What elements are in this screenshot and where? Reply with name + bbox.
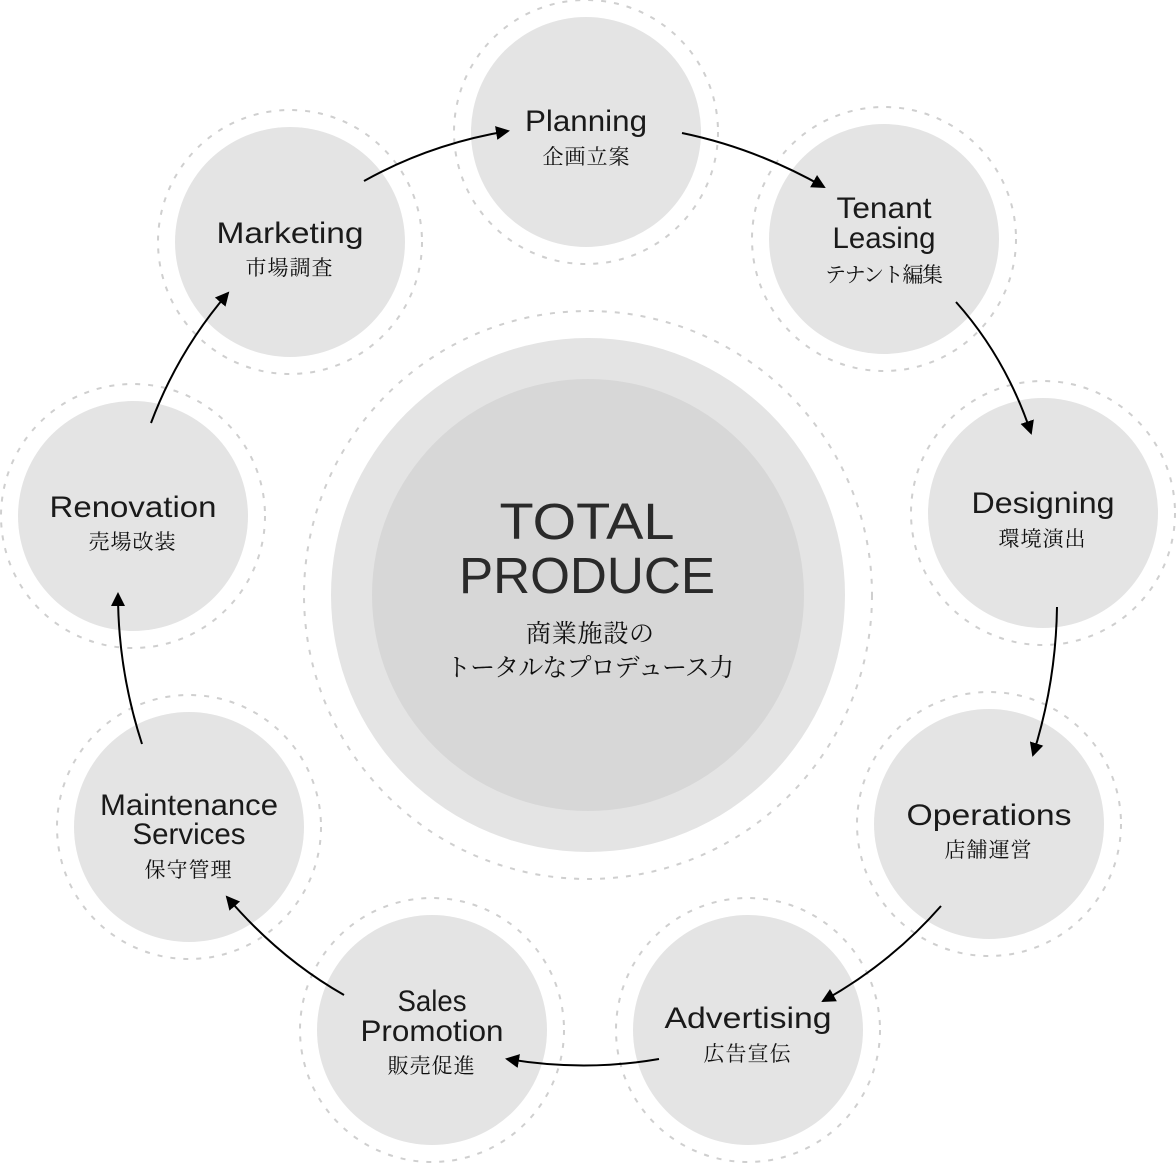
node: Tenant Leasing: Tenant <box>836 192 932 225</box>
node: Tenant Leasing <box>752 107 1016 371</box>
node: Maintenance Services <box>57 695 321 959</box>
arrow: Designing to Operations <box>1033 607 1057 755</box>
node: Designing <box>911 381 1175 645</box>
arrow: Marketing to Planning <box>364 131 508 181</box>
arrow: Sales Promotion to Maintenance <box>227 897 344 995</box>
arrow: Operations to Advertising <box>823 906 941 1001</box>
node: Advertising: Advertising <box>664 1002 832 1035</box>
node: Operations: Operations <box>906 799 1072 832</box>
node: Renovation: Renovation <box>50 491 216 524</box>
node: Tenant Leasing: Leasing <box>832 222 936 255</box>
node: Advertising <box>616 898 880 1162</box>
node: Maintenance Services: Maintenance <box>100 789 278 822</box>
center: total produce <box>304 311 872 879</box>
node: Planning: Planning <box>525 105 647 138</box>
node: Renovation: 売場改装 <box>88 530 176 554</box>
node: Tenant Leasing: テナント編集 <box>825 263 943 287</box>
arrow: Maintenance to Renovation <box>118 594 142 744</box>
node: Designing: 環境演出 <box>998 527 1086 551</box>
node: Sales Promotion <box>300 898 564 1162</box>
node: Maintenance Services: Services <box>132 818 246 851</box>
node: Sales Promotion: Promotion <box>360 1015 504 1048</box>
node: Planning <box>454 0 718 264</box>
arrow: Renovation to Marketing <box>151 293 228 423</box>
arrow: Advertising to Sales Promotion <box>507 1059 659 1066</box>
node: Designing: Designing <box>972 487 1114 520</box>
node: Marketing <box>158 110 422 374</box>
center subtitle second line: トータルなプロデュース力 <box>446 654 734 682</box>
node: Advertising: 広告宣伝 <box>704 1042 792 1066</box>
node: Sales Promotion: 販売促進 <box>388 1054 474 1078</box>
node: Marketing: 市場調査 <box>246 256 332 280</box>
node: Marketing: Marketing <box>216 217 364 250</box>
node: Renovation <box>1 384 265 648</box>
arrow: Tenant Leasing to Designing <box>956 302 1031 433</box>
node: Operations: 店舗運営 <box>944 838 1032 862</box>
node: Sales Promotion: Sales <box>398 985 466 1018</box>
arrow: Planning to Tenant Leasing <box>682 133 824 187</box>
center subtitle: 商業施設の <box>526 620 654 648</box>
center title: TOTAL <box>500 493 674 550</box>
node: Maintenance Services: 保守管理 <box>144 858 232 882</box>
center title second line: PRODUCE <box>459 547 715 604</box>
node: Operations <box>857 692 1121 956</box>
node: Planning: 企画立案 <box>542 145 630 169</box>
